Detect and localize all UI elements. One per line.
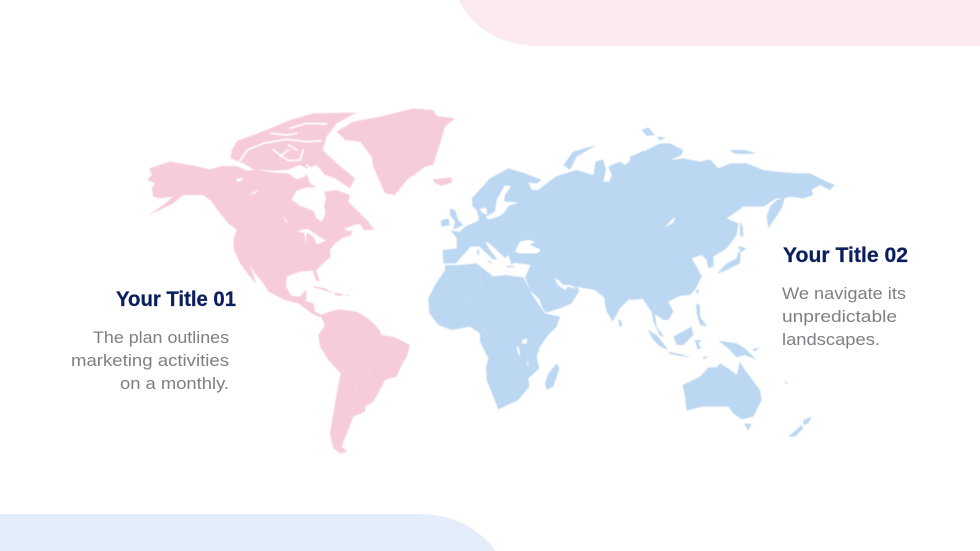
Southeast Asia and Oceania (647, 303, 812, 437)
description: unpredictable landscapes: We navigate its (782, 284, 906, 303)
text block: Title 02 (782, 244, 908, 349)
New Zealand (788, 425, 803, 437)
world map (147, 108, 835, 453)
South America (318, 309, 410, 453)
South Asia and Arabia (540, 240, 690, 337)
heading: Your Title 01: Your Title 01 (116, 288, 236, 311)
Greenland and Iceland (337, 108, 455, 195)
heading: Your Title 02: Your Title 02 (783, 244, 908, 267)
map: Europe, Asia, Africa and Oceania in blue (428, 127, 835, 437)
Europe and the Middle East (443, 220, 580, 300)
decorative top-right pink banner (459, 0, 980, 46)
description: unpredictable landscapes (782, 284, 906, 349)
decorative bottom-left blue banner (0, 514, 496, 551)
East Asia, Japan and the Arctic islands (630, 127, 835, 300)
Arctic archipelago (231, 113, 357, 188)
map: Americas and Greenland in pink (147, 108, 455, 453)
Scandinavia, Russia and northern Asia (441, 145, 643, 253)
description: unpredictable landscapes: unpredictable (782, 307, 897, 326)
description: plan outlines (71, 328, 229, 393)
North America (147, 113, 374, 300)
Africa (428, 263, 560, 409)
Australia (683, 362, 762, 419)
description: plan outlines: The plan outlines (93, 328, 229, 347)
text block: Title 01 (71, 288, 236, 393)
description: unpredictable landscapes: landscapes. (782, 330, 880, 349)
description: plan outlines: on a monthly. (120, 374, 229, 393)
Madagascar (545, 363, 559, 390)
Central America and Caribbean (270, 286, 349, 317)
description: plan outlines: marketing activities (71, 351, 229, 370)
